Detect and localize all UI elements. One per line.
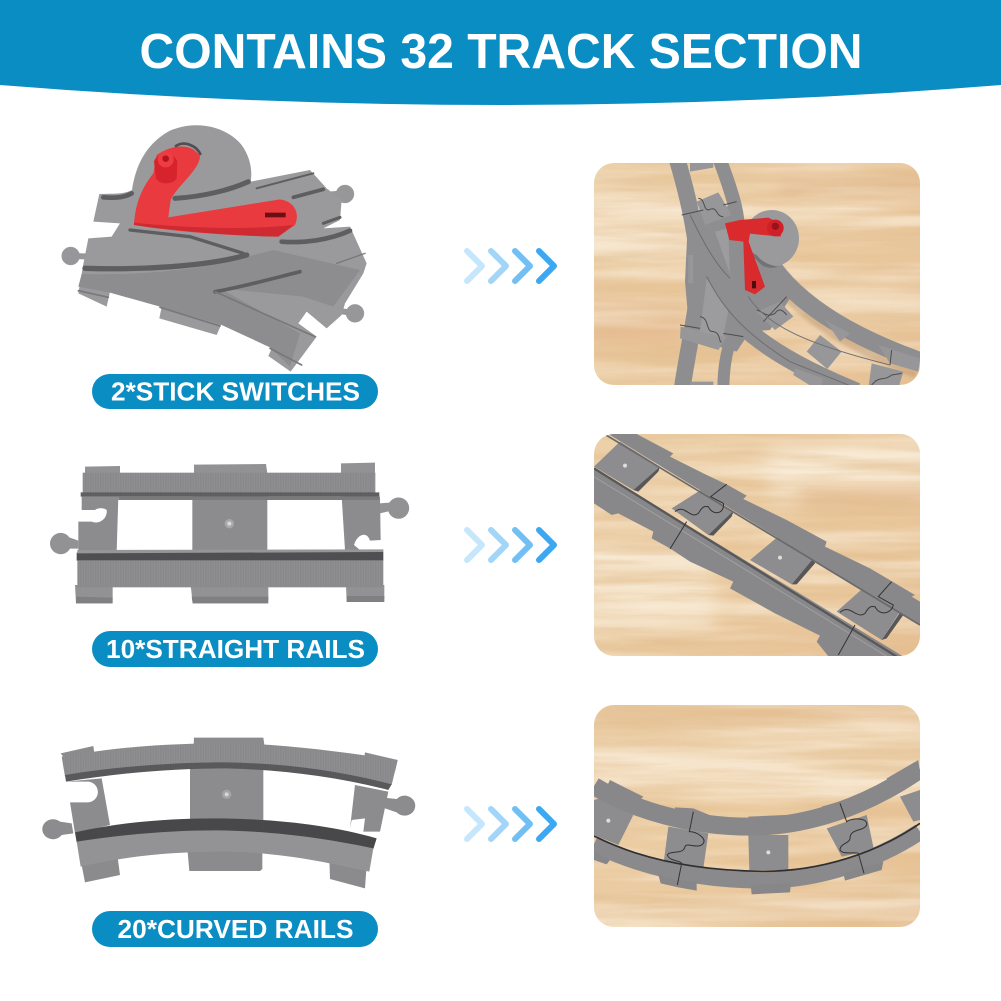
sleepers (594, 442, 900, 640)
tabs (61, 738, 398, 888)
rail grooves (78, 173, 365, 365)
joint lines (670, 484, 893, 655)
arrows row 3 (467, 809, 554, 839)
label: 2*stick switches: 2*STICK SWITCHES (111, 376, 360, 406)
upper rail (83, 473, 375, 493)
photo red lever (725, 218, 783, 294)
left connector (78, 497, 118, 552)
header banner (0, 0, 1001, 105)
lower rail (594, 470, 902, 656)
lever peg (154, 154, 177, 183)
lower curved rail (594, 832, 920, 880)
photo switch track (677, 160, 920, 392)
panel: straight rail product (50, 463, 409, 603)
upper rail (610, 434, 920, 625)
label: 20*curved rails (92, 911, 378, 947)
title: CONTAINS 32 TRACK SECTION (140, 25, 862, 79)
upper curved rail (62, 743, 398, 785)
upper curved rail (594, 769, 920, 827)
sleepers (594, 790, 920, 870)
right connector (342, 497, 381, 550)
knobs (50, 497, 409, 554)
joint and rail lines (680, 198, 902, 388)
label: 20*curved rails: 20*CURVED RAILS (118, 914, 354, 944)
studs (623, 464, 627, 468)
connector knobs (62, 185, 364, 322)
lever slot (265, 213, 286, 217)
photo: switch on wood table (594, 163, 920, 385)
red switch lever (134, 144, 297, 237)
panel: stick switch product (62, 125, 367, 372)
sleeper stud (225, 519, 234, 528)
label: 10*straight rails: 10*STRAIGHT RAILS (106, 634, 365, 664)
ribbed lower surface (78, 250, 360, 367)
switch track body (78, 125, 367, 372)
knobs (42, 796, 415, 839)
photo: curved rails on wood table (590, 705, 930, 927)
connectors and sleeper (66, 767, 388, 833)
photo: straight rails on wood table (585, 434, 930, 667)
joint lines (667, 803, 867, 885)
arrows row 1 (467, 251, 554, 281)
tabs (75, 463, 384, 603)
photo puck (744, 210, 799, 267)
sleeper stud (222, 790, 231, 799)
photo track shadows (787, 300, 920, 378)
lower rail (77, 551, 383, 561)
center sleeper (192, 497, 267, 552)
switch frog and sleepers (685, 205, 790, 352)
panel: curved rail product (42, 738, 415, 888)
arrows row 2 (467, 530, 554, 560)
lower curved rail (75, 818, 377, 849)
studs (606, 819, 610, 823)
